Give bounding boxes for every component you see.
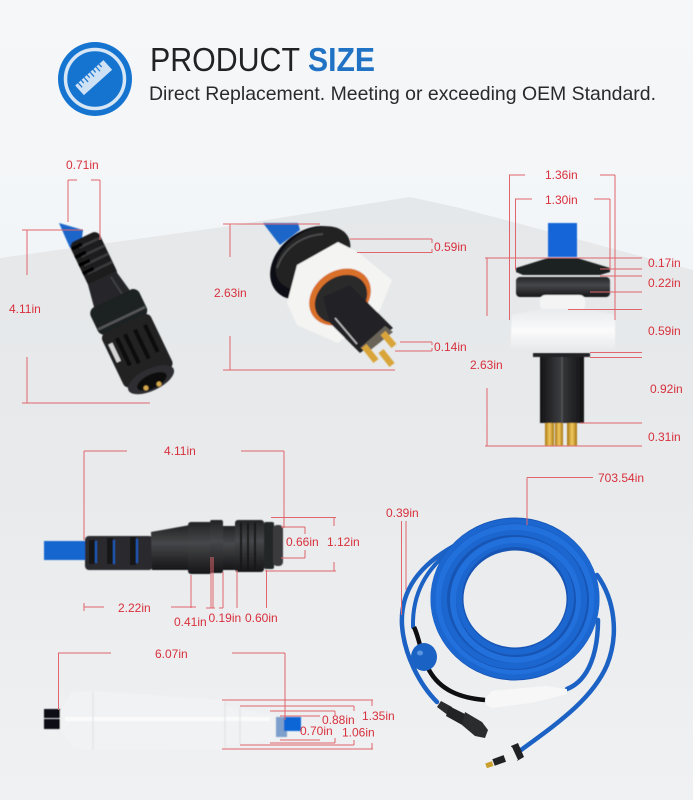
label 0.19in: 0.19in: [208, 611, 241, 625]
pins: [144, 382, 162, 390]
label 0.71in: 0.71in: [66, 158, 99, 172]
white inline body: [486, 686, 567, 708]
title: PRODUCT: [150, 41, 300, 78]
label 0.17in: 0.17in: [648, 256, 681, 270]
small hex connector: [485, 743, 524, 768]
loose cable strands: [402, 546, 614, 750]
label 0.39in: 0.39in: [386, 506, 419, 520]
label 0.14in: 0.14in: [434, 340, 467, 354]
label 0.41in: 0.41in: [174, 615, 207, 629]
dimensions: cable coil: [386, 471, 644, 615]
label 6.07in: 6.07in: [155, 647, 188, 661]
label 0.59in: 0.59in: [648, 324, 681, 338]
label 0.70in: 0.70in: [300, 724, 333, 738]
label 2.63in: 2.63in: [214, 286, 247, 300]
connector photo: translucent float body: [44, 691, 301, 750]
label 1.35in: 1.35in: [362, 709, 395, 723]
connector photo: hex fitting angled: [256, 211, 394, 365]
label 0.59in: 0.59in: [434, 240, 467, 254]
dimensions: straight fitting: [470, 168, 683, 446]
subtitle: Direct Replacement. Meeting or exceeding OEM Standard.: [149, 83, 656, 105]
dimensions: float body: [58, 647, 395, 749]
label 0.22in: 0.22in: [648, 276, 681, 290]
label 0.66in: 0.66in: [286, 535, 319, 549]
label 0.92in: 0.92in: [650, 382, 683, 396]
dimensions: side view plug: [84, 444, 360, 629]
label 703.54in: 703.54in: [598, 471, 644, 485]
label 4.11in: 4.11in: [9, 302, 41, 316]
label 1.06in: 1.06in: [342, 726, 375, 740]
label 2.22in: 2.22in: [118, 601, 151, 615]
icon: ruler badge: [58, 42, 132, 116]
label 0.88in: 0.88in: [322, 713, 355, 727]
main coil: [433, 521, 597, 677]
label 0.60in: 0.60in: [245, 611, 278, 625]
label 1.30in: 1.30in: [545, 193, 578, 207]
title accent: SIZE: [308, 41, 375, 78]
float ball and black lead: [411, 627, 485, 700]
label 0.31in: 0.31in: [648, 430, 681, 444]
label 1.36in: 1.36in: [545, 168, 578, 182]
connector photo: angled plug: [59, 223, 180, 401]
label 1.12in: 1.12in: [327, 535, 360, 549]
connector photo: straight fitting: [510, 223, 615, 446]
small black connector: [437, 701, 488, 738]
header: [58, 41, 656, 116]
dimensions: hex fitting angled: [214, 224, 467, 370]
label 4.11in: 4.11in: [164, 444, 196, 458]
dimensions: angled plug: [9, 158, 150, 403]
label 2.63in: 2.63in: [470, 358, 503, 372]
cable coil photo: [402, 521, 614, 768]
connector photo: side view plug: [44, 520, 283, 574]
